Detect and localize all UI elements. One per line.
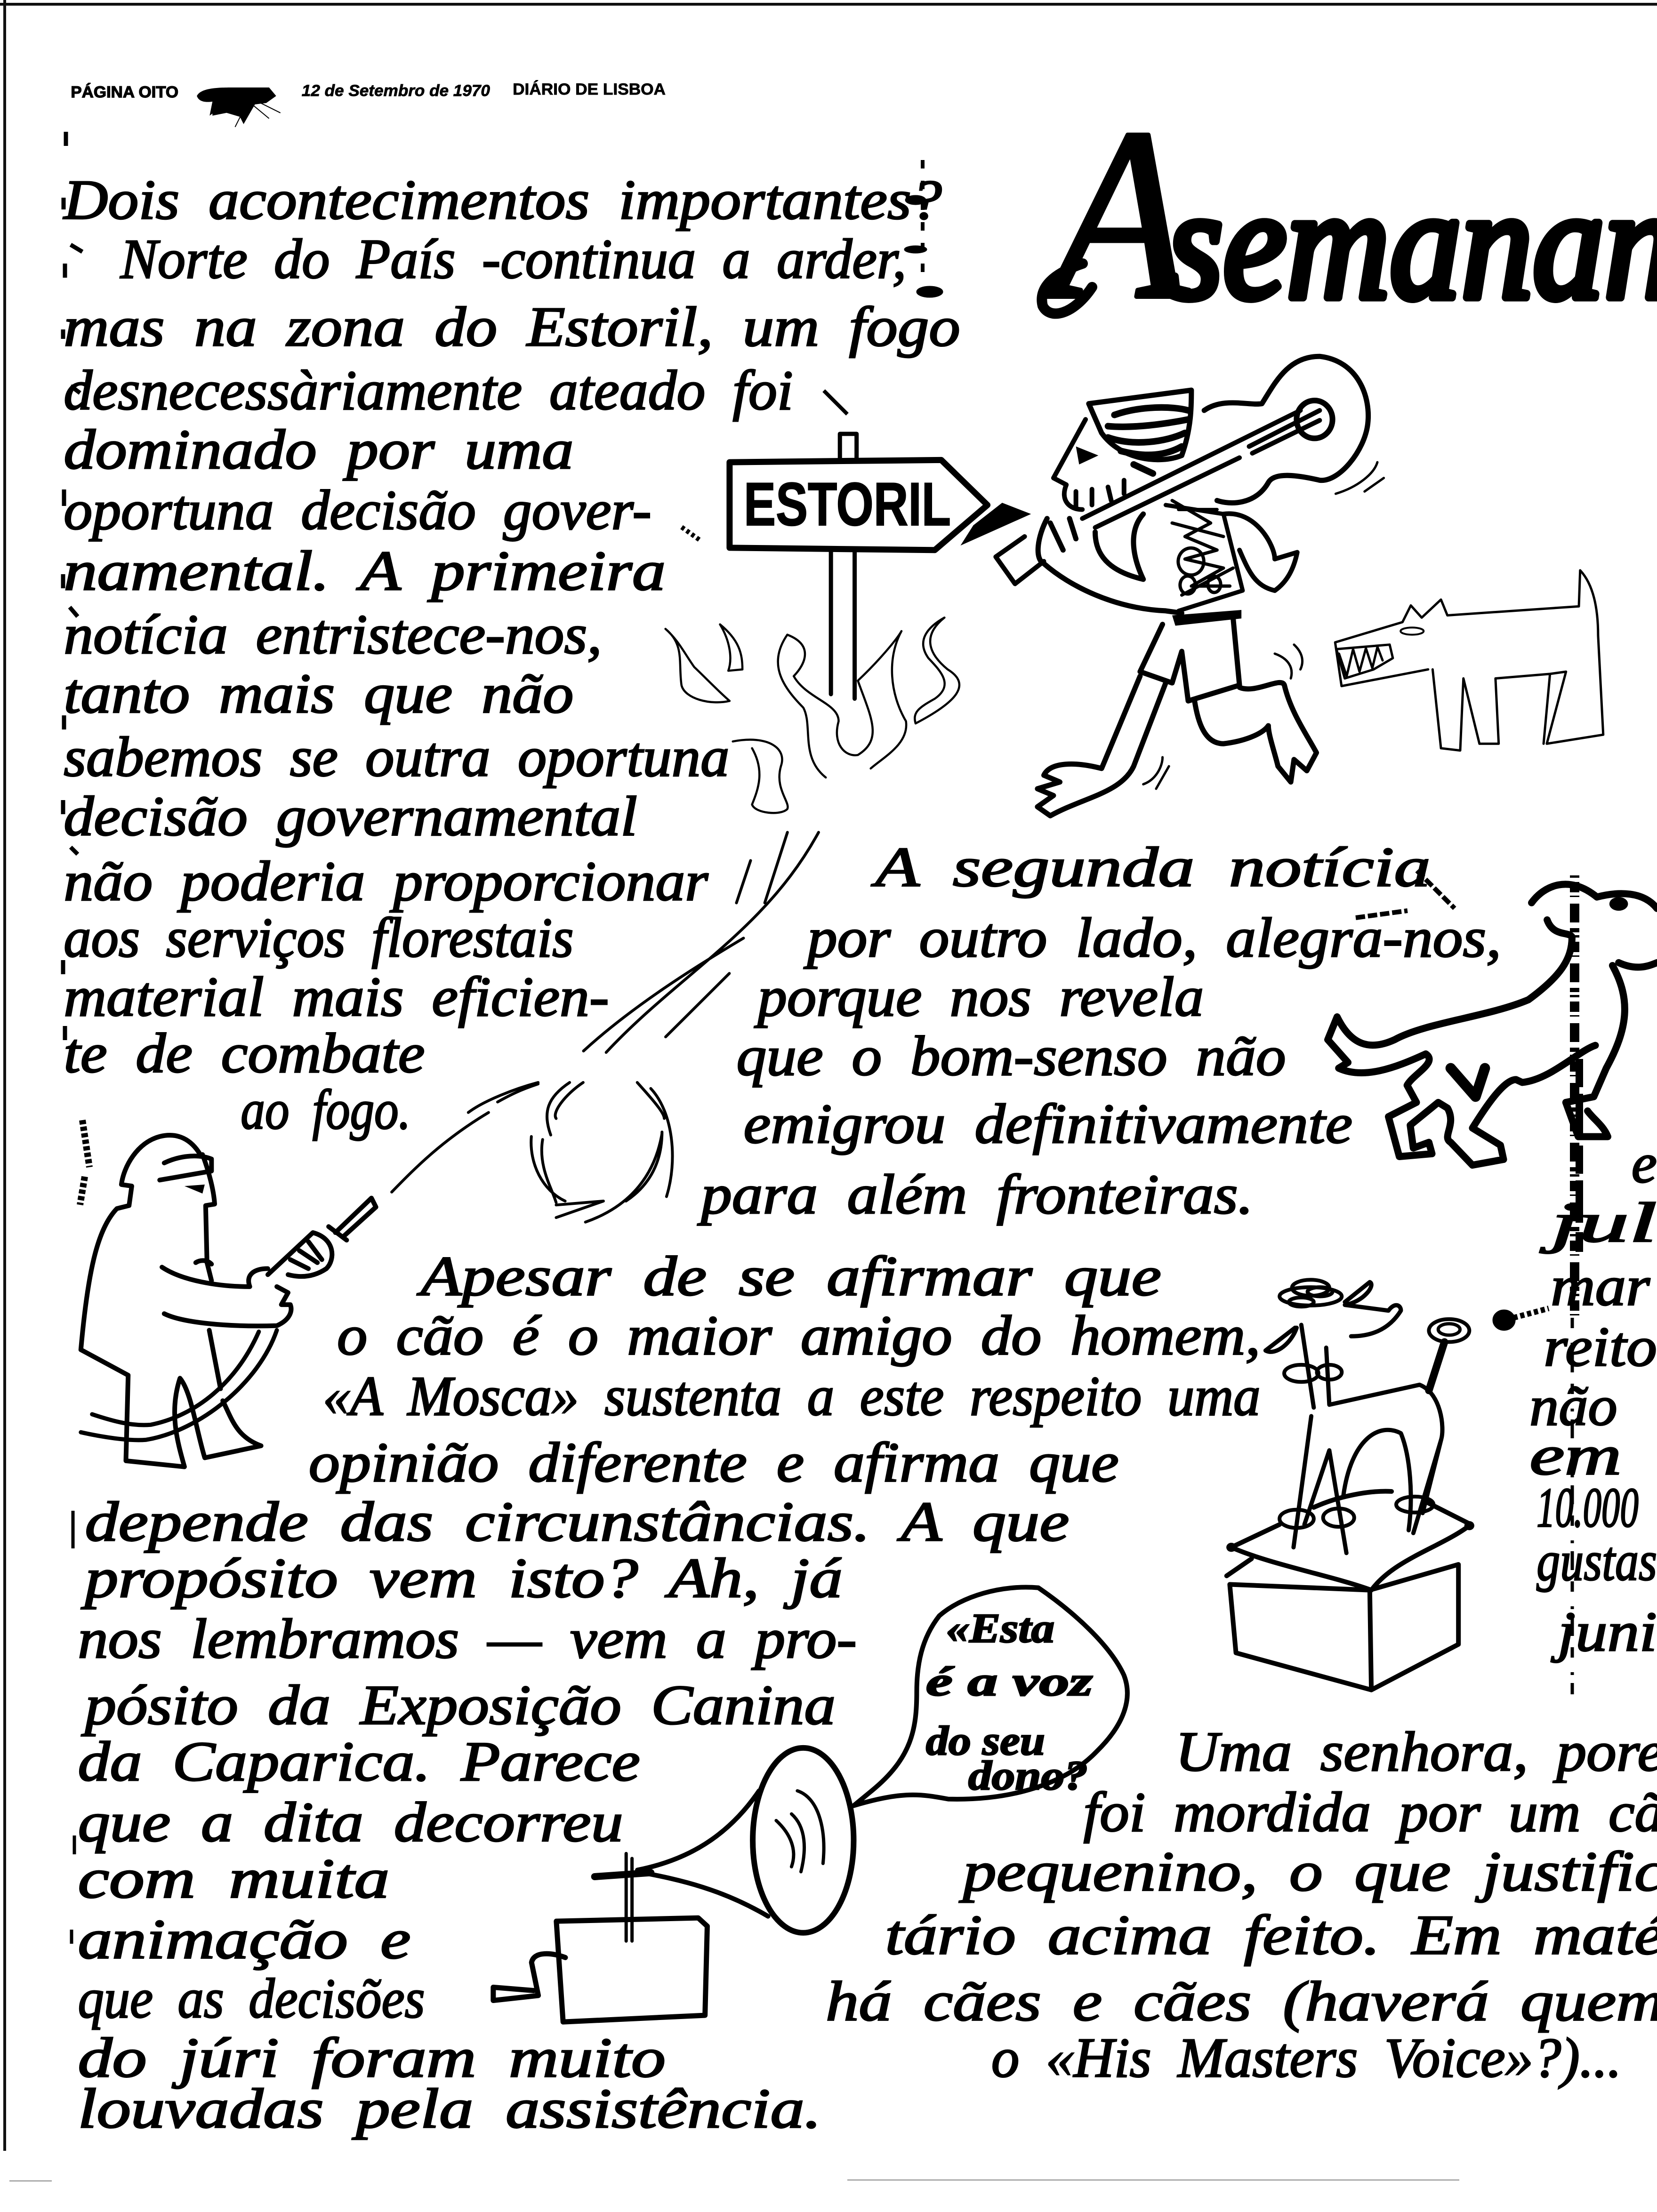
- arm and hand: [162, 1233, 332, 1389]
- text block: dog show item: pósito da Exposição Canina: [81, 1674, 836, 1736]
- text block: second news item: que o bom-senso não: [736, 1025, 1286, 1087]
- text block: first news item, forest fires: sabemos se outra oportuna: [64, 726, 729, 788]
- text block: dog show item: nos lembramos — vem a pro-: [78, 1607, 857, 1670]
- guitar: [996, 356, 1368, 584]
- text block: first news item, forest fires: [63, 168, 960, 1141]
- text block: first news item, forest fires: ao fogo.: [241, 1078, 410, 1141]
- text block: dog show item: que as decisões: [78, 1967, 425, 2029]
- text block: dog show item: do júri foram muito: [78, 2027, 666, 2089]
- text block: dog show item: animação e: [78, 1908, 410, 1970]
- shorts and legs: [1038, 610, 1317, 816]
- water jet loop: [392, 1082, 672, 1222]
- illustration: dog with raised head: [1328, 884, 1657, 1165]
- text block: first news item, forest fires: tanto mais que não: [64, 662, 573, 725]
- text block: second news item: emigrou definitivamente: [743, 1092, 1352, 1155]
- text block: second news item: [697, 836, 1501, 1226]
- illustration: gramophone: [493, 1748, 853, 2022]
- torso, arm and vest: [1038, 500, 1297, 613]
- figure body: [81, 1135, 261, 1467]
- cushion and box: [1226, 1491, 1474, 1690]
- gramophone box: [556, 1918, 707, 2022]
- text block: first news item, forest fires: Norte do País -continua a arder,: [120, 228, 906, 290]
- text block: dog show item: que a dita decorreu: [78, 1791, 623, 1853]
- speech bubble: His Master's Voice: «Esta: [946, 1606, 1054, 1651]
- text block: bitten lady item: [826, 1720, 1657, 2089]
- horn: [637, 1791, 768, 1916]
- text block: first news item, forest fires: notícia entristece-nos,: [64, 603, 602, 665]
- text block: cropped right column: mar: [1551, 1255, 1650, 1317]
- text block: cropped right column: em: [1529, 1424, 1622, 1486]
- hose: [81, 1330, 277, 1440]
- text block: cropped right column: não: [1529, 1375, 1617, 1437]
- text block: second news item: para além fronteiras.: [697, 1163, 1254, 1226]
- text block: bitten lady item: o «His Masters Voice»?)...: [991, 2027, 1622, 2089]
- text block: cropped right column: jul: [1540, 1191, 1657, 1254]
- text block: dog show item: opinião diferente e afirma que: [309, 1431, 1119, 1493]
- text block: bitten lady item: foi mordida por um cã: [1084, 1781, 1657, 1843]
- speech bubble: His Master's Voice: dono?: [968, 1753, 1088, 1799]
- speech bubble: His Master's Voice: do seu: [926, 1718, 1045, 1764]
- illustration: snarling wolf dog: [1335, 570, 1603, 751]
- folio: page label: PÁGINA OITO: [71, 82, 178, 101]
- icon: fly: [197, 88, 281, 127]
- illustration: firefighter with hose: [81, 1082, 672, 1467]
- text block: dog show item: com muita: [78, 1847, 389, 1910]
- post and tube: [626, 1853, 632, 1941]
- text block: first news item, forest fires: não poderia proporcionar: [64, 850, 709, 912]
- text block: first news item, forest fires: te de combate: [64, 1022, 425, 1084]
- speech bubble: His Master's Voice: [853, 1587, 1127, 1806]
- text block: cropped right column: reito: [1544, 1315, 1657, 1378]
- title: A semana na Mosca: A: [1038, 79, 1192, 350]
- text block: first news item, forest fires: desnecessàriamente ateado foi: [64, 359, 793, 421]
- poodle: [1265, 1280, 1469, 1553]
- speech bubble: His Master's Voice: é a voz: [926, 1659, 1093, 1705]
- text block: dog show item: louvadas pela assistência.: [78, 2077, 821, 2140]
- text block: cropped right column: [1529, 1132, 1657, 1663]
- text block: dog show item: depende das circunstâncias. A que: [85, 1490, 1069, 1553]
- page fold damage and ink specks: [682, 160, 1579, 1694]
- text block: dog show item: da Caparica. Parece: [78, 1730, 640, 1793]
- newspaper folio header: [71, 80, 666, 127]
- text block: dog show item: «A Mosca» sustenta a este respeito uma: [323, 1365, 1261, 1427]
- text block: bitten lady item: Uma senhora, pore: [1175, 1720, 1657, 1783]
- text block: first news item, forest fires: dominado por uma: [64, 418, 573, 481]
- text block: dog show item: Apesar de se afirmar que: [417, 1245, 1161, 1307]
- illustration: flames around the signpost: [666, 617, 959, 813]
- text block: cropped right column: juni: [1551, 1600, 1657, 1663]
- illustration: poodle on a cushion: [1226, 1280, 1474, 1690]
- text block: first news item, forest fires: oportuna decisão gover-: [64, 479, 652, 541]
- text block: dog show item: propósito vem isto? Ah, já: [80, 1547, 843, 1609]
- illustration: water jet reaching the flames: [584, 833, 819, 1052]
- signpost: Estoril: [730, 434, 1031, 699]
- text block: bitten lady item: há cães e cães (haverá quem: [826, 1970, 1657, 2032]
- hat and head: [1054, 390, 1191, 510]
- helmet and face: [160, 1154, 215, 1281]
- text block: first news item, forest fires: material mais eficien-: [64, 965, 609, 1028]
- text block: second news item: A segunda notícia: [871, 836, 1431, 898]
- text block: first news item, forest fires: aos serviços florestais: [64, 906, 573, 969]
- text block: first news item, forest fires: decisão governamental: [64, 785, 637, 847]
- text block: cropped right column: e: [1632, 1132, 1657, 1194]
- page margin ink noise: [63, 132, 89, 1944]
- text block: first news item, forest fires: Dois acontecimentos importantes?: [63, 168, 942, 231]
- text block: dog show item: o cão é o maior amigo do homem,: [337, 1304, 1261, 1367]
- illustration: hippie walking with guitar: [996, 356, 1384, 816]
- motion lines: [1143, 462, 1384, 789]
- nozzle: [329, 1198, 376, 1240]
- text block: dog show item: [78, 1245, 1261, 2140]
- text block: bitten lady item: tário acima feito. Em maté: [885, 1904, 1657, 1966]
- text block: first news item, forest fires: namental. A primeira: [64, 539, 666, 602]
- crank: [493, 1954, 565, 2001]
- folio: newspaper name: DIÁRIO DE LISBOA: [513, 80, 666, 98]
- text block: bitten lady item: pequenino, o que justific: [958, 1840, 1657, 1903]
- text block: first news item, forest fires: mas na zona do Estoril, um fogo: [64, 296, 960, 358]
- text block: second news item: porque nos revela: [754, 965, 1204, 1028]
- title: A semana na Mosca: [1038, 79, 1657, 350]
- folio: date: 12 de Setembro de 1970: [302, 82, 490, 100]
- signpost: Estoril: ESTORIL: [744, 470, 951, 538]
- text block: second news item: por outro lado, alegra-nos,: [803, 906, 1501, 969]
